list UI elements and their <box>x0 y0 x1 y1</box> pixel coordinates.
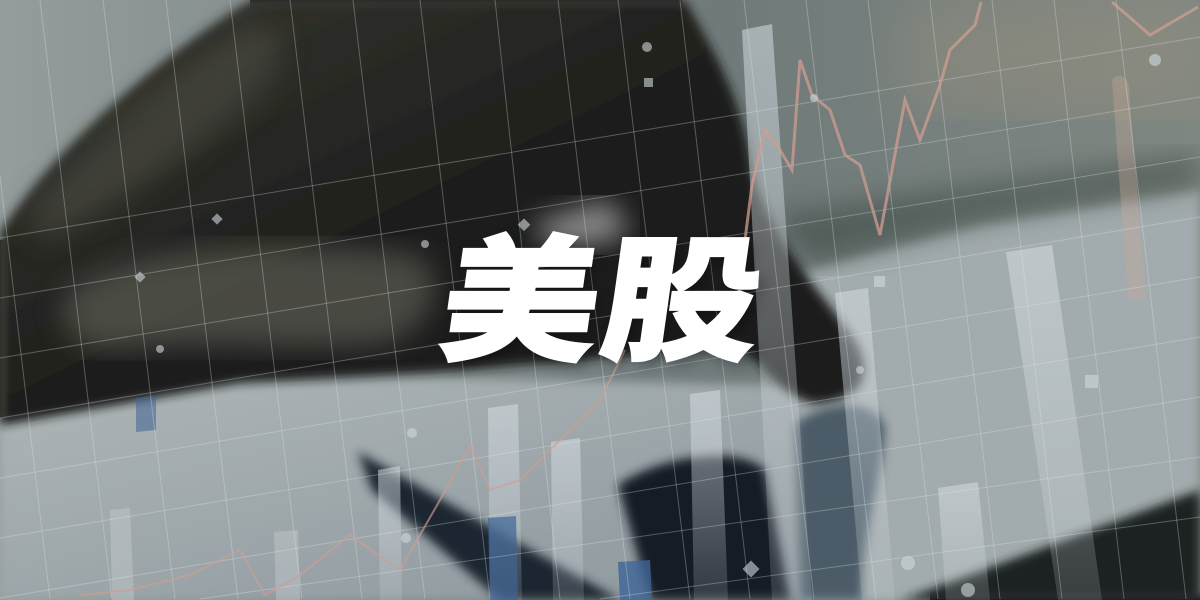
shadow above the right sheet <box>770 155 1200 265</box>
hand: top edge fill <box>250 0 682 10</box>
scattered data points <box>134 42 1161 597</box>
hand highlight: fingertip <box>530 200 630 250</box>
hand highlight: thumb <box>62 246 434 350</box>
paper: right sheet <box>800 190 1200 600</box>
phone: dark body <box>358 452 620 600</box>
hand highlight: upper finger <box>30 25 283 245</box>
hand: left edge fill <box>0 240 10 418</box>
phone: dark block <box>618 456 790 600</box>
finger: grey blue <box>795 405 885 600</box>
line chart upper right <box>745 2 1198 240</box>
paper: lower left sheet <box>0 378 900 600</box>
line chart lower left <box>80 350 625 595</box>
title: 美股 <box>431 227 775 379</box>
hand: dark fingers <box>0 0 864 425</box>
bottom edge fill <box>930 590 1200 600</box>
phone: bottom right dark corner <box>905 490 1200 600</box>
